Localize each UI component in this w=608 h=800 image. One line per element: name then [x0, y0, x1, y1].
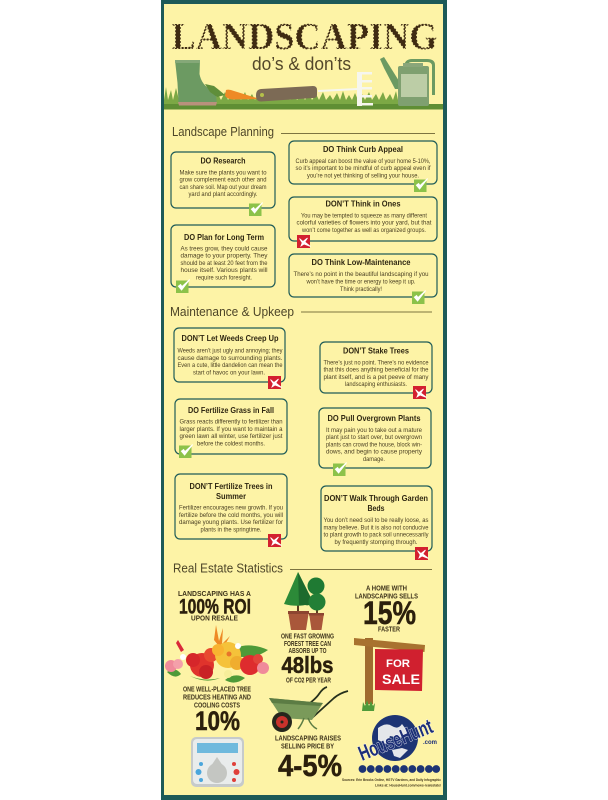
icon: for sale sign	[354, 638, 425, 711]
text block: Walk Through	[324, 517, 429, 546]
text block: Weeds	[178, 348, 283, 376]
sign text	[382, 658, 420, 687]
stat: 4-5%	[275, 734, 342, 783]
text block: Low-Maintenance	[294, 271, 429, 293]
panel: DON'T Think in Ones	[289, 197, 437, 248]
text block: Curb Appeal: you’re not yet thinking of selling your house.	[307, 172, 419, 180]
heading: Fertilize Trees	[190, 481, 272, 501]
text block: Walk Through: by frequently stomping through.	[334, 539, 418, 546]
panel: DO Fertilize Grass in Fall	[175, 399, 287, 458]
text block: Plan for Long Term: damage to your property. They	[180, 252, 268, 260]
stat: 100% ROI: LANDSCAPING HAS A	[178, 589, 251, 598]
text block: Plan for Long Term: house itself. Various plants will	[180, 267, 268, 274]
stat: 15%: A HOME WITH	[366, 584, 407, 592]
text block: Pull Overgrown Plants	[326, 427, 423, 463]
stat: 10%: 10%	[195, 706, 240, 736]
text block: Pull Overgrown Plants: plant just to start over, but overgrown	[326, 434, 422, 441]
text block: Weeds: cause damage to surrounding plants.	[178, 355, 283, 362]
title: LANDSCAPING	[172, 16, 438, 58]
text block: Think in Ones	[296, 212, 432, 234]
icon: hand rake	[256, 72, 373, 106]
icon: check	[179, 445, 193, 458]
text block: Low-Maintenance: There’s no point in the beautiful landscaping if you	[294, 271, 429, 278]
text block: Fertilize Grass: larger plants. If you want to maintain a	[180, 426, 283, 433]
subtitle: do’s & don’ts	[252, 54, 351, 74]
stat: 15%: LANDSCAPING SELLS	[355, 592, 418, 600]
page frame	[161, 0, 447, 800]
heading: Walk Through: DON’T Walk Through Garden	[324, 493, 428, 503]
icon: cross	[268, 376, 282, 389]
text block: Walk Through: to plant growth to pack soil unnecessarily	[324, 532, 429, 538]
text block: Stake Trees: landscaping enthusiasts.	[345, 381, 407, 388]
stat: 10%: COOLING COSTS	[194, 700, 240, 710]
text block: Low-Maintenance: won’t have the time or energy to keep it up.	[306, 278, 416, 286]
text block: Fertilize Trees: fertilize before the cold months, you will	[179, 512, 283, 519]
heading: Landscape Planning: Landscape Planning	[172, 124, 274, 139]
text block: Plan for Long Term	[180, 246, 268, 282]
stat: 48lbs: ONE FAST GROWING	[281, 632, 334, 640]
text block: Curb Appeal: Curb appeal can boost the value of your home 5-10%,	[296, 158, 431, 165]
text block: Weeds: Weeds aren’t just ugly and annoying; they	[178, 348, 283, 354]
text block: Weeds: start of havoc on your lawn.	[193, 370, 265, 376]
stat: 48lbs: FOREST TREE CAN	[284, 639, 331, 648]
text block: Fertilize Grass: Grass reacts differently to fertilizer than	[180, 418, 283, 426]
icon: cross	[268, 534, 282, 547]
icon: thermostat	[191, 737, 244, 787]
heading: Pull Overgrown Plants: DO Pull Overgrown Plants	[328, 413, 421, 423]
text block: DO Research: yard and plant accordingly.	[188, 191, 258, 198]
icon: check	[414, 179, 428, 192]
text block: Curb Appeal: so it’s important to be mindful of curb appeal even if	[296, 165, 431, 172]
text block: Fertilize Trees	[179, 504, 284, 534]
text block: Fertilize Trees: Fertilizer encourages new growth. If you	[179, 504, 283, 512]
grass band	[164, 87, 443, 110]
text block: Think in Ones: won’t come together as well as organized groups.	[301, 227, 426, 234]
heading: Fertilize Trees: DON’T Fertilize Trees in	[190, 481, 272, 491]
sources: Links at: HouseHunt.com/news-realestate/	[375, 784, 442, 788]
heading: Weeds: DON’T Let Weeds Creep Up	[182, 333, 278, 343]
text block: Stake Trees: There’s just no point. There’s no evidence	[324, 360, 429, 366]
text block: Pull Overgrown Plants: It may pain you to take out a mature	[326, 427, 422, 434]
text block: Low-Maintenance: Think practically!	[340, 286, 382, 293]
icon: cross	[415, 547, 428, 560]
heading: Real Estate Statistics: Real Estate Statistics	[173, 560, 283, 576]
icon: cross	[413, 386, 426, 399]
panel: DON'T Let Weeds Creep Up	[174, 328, 285, 389]
stat: 10%: REDUCES HEATING AND	[183, 692, 251, 702]
stat: 4-5%: SELLING PRICE BY	[281, 742, 334, 750]
text block: Pull Overgrown Plants: damage.	[363, 456, 385, 463]
panel: DON'T Stake Trees	[320, 342, 432, 399]
text block: Fertilize Trees: damage young plants. Use fertilizer for	[179, 519, 284, 526]
icon: check	[249, 203, 263, 216]
icon: rubber boot	[175, 60, 217, 106]
heading: Low-Maintenance: DO Think Low-Maintenance	[312, 257, 411, 267]
heading: Fertilize Grass: DO Fertilize Grass in Fall	[188, 405, 274, 415]
stat: 4-5%: 4-5%	[278, 748, 342, 783]
logo: HouseHunt	[355, 715, 437, 766]
text block: Plan for Long Term: As trees grow, they could cause	[180, 246, 268, 252]
icon: check	[333, 463, 347, 476]
icon: wheelbarrow	[269, 687, 348, 732]
social media icons	[359, 765, 440, 773]
text block: DO Research	[180, 170, 267, 198]
sign text: SALE	[382, 671, 420, 687]
icon: watering can	[380, 57, 435, 106]
text block: DO Research: can share soil. Map out your dream	[180, 184, 267, 191]
panel: DO Think Low-Maintenance	[289, 254, 437, 304]
panel: DO Think Curb Appeal	[289, 141, 437, 192]
stat: 100% ROI	[178, 589, 251, 622]
panel: DO Research	[171, 152, 275, 216]
text block: Weeds: Even a cute, little dandelion can mean the	[178, 362, 283, 369]
panel: DON'T Fertilize Trees in Summer	[175, 474, 287, 547]
header illustration	[164, 16, 443, 110]
text block: Pull Overgrown Plants: dows, and begin to cause property	[326, 448, 423, 456]
text block: Think in Ones: You may be tempted to squeeze as many different	[301, 212, 427, 220]
text block: DO Research: Make sure the plants you want to	[180, 170, 267, 176]
icon: tropical flowers	[165, 625, 269, 683]
text block: Plan for Long Term: should be at least 20 feet from the	[180, 260, 268, 267]
text block: DO Research: grow complement each other and	[180, 176, 267, 184]
stat: 15%	[355, 584, 418, 634]
stat: 100% ROI: UPON RESALE	[191, 614, 238, 622]
page background	[164, 4, 443, 795]
stat: 4-5%: LANDSCAPING RAISES	[275, 734, 341, 742]
icon: cross	[297, 235, 310, 248]
icon: potted topiary trees	[284, 572, 326, 630]
stat: 15%: FASTER	[378, 624, 400, 634]
icon: check	[412, 291, 426, 304]
stat: 48lbs: ABSORB UP TO	[288, 646, 327, 655]
panel: DO Pull Overgrown Plants	[319, 408, 431, 476]
text block: Think in Ones: colorful varieties of flowers into your yard, but that	[296, 220, 432, 226]
sources: Sources: Erin Brooks Online, HGTV Gardens, and Daily Infographic	[342, 778, 441, 782]
heading: Plan for Long Term: DO Plan for Long Term	[184, 232, 264, 242]
heading: Walk Through	[324, 493, 428, 513]
heading: DO Research: DO Research	[200, 156, 246, 166]
text block: Stake Trees: plant itself, and is a pet peeve of many	[324, 374, 429, 381]
panel: DO Plan for Long Term	[171, 225, 275, 293]
text block: Fertilize Grass: green lawn all winter, use fertilizer just	[180, 433, 283, 440]
text block: Stake Trees	[324, 360, 429, 388]
heading: Curb Appeal: DO Think Curb Appeal	[323, 144, 403, 154]
text block: Plan for Long Term: require such foresight.	[196, 274, 252, 282]
heading: Stake Trees: DON’T Stake Trees	[343, 346, 409, 356]
heading: Think in Ones: DON’T Think in Ones	[326, 198, 401, 208]
stat: 48lbs: OF CO2 PER YEAR	[286, 676, 331, 684]
logo: HouseHunt: .com	[423, 740, 437, 746]
icon: carrot	[205, 84, 260, 100]
icon: check	[176, 280, 190, 293]
text block: Curb Appeal	[296, 158, 431, 180]
stat: 48lbs: 48lbs	[282, 652, 334, 678]
text block: Pull Overgrown Plants: plants can crowd the house, block win-	[326, 442, 422, 448]
text block: Fertilize Grass: before the coldest months.	[197, 440, 265, 448]
stat: 48lbs	[281, 632, 334, 684]
text block: Walk Through: You don’t need soil to be really loose, as	[324, 517, 429, 524]
heading: Fertilize Trees: Summer	[216, 491, 247, 501]
heading: Walk Through: Beds	[368, 503, 385, 513]
text block: Stake Trees: that this does anything beneficial for the	[324, 366, 429, 374]
stat: 100% ROI: 100% ROI	[179, 596, 251, 618]
sign text: FOR	[386, 658, 410, 670]
text block: Walk Through: many believe. But it is also not conducive	[324, 524, 429, 532]
stat: 15%: 15%	[363, 595, 416, 631]
heading: Maintenance & Upkeep: Maintenance & Upkeep	[170, 304, 294, 319]
sources	[342, 778, 442, 788]
stat: 10%	[183, 684, 251, 736]
panel: DON'T Walk Through Garden Beds	[321, 486, 432, 560]
text block: Fertilize Grass	[180, 418, 283, 448]
text block: Fertilize Trees: plants in the springtime.	[200, 526, 262, 534]
stat: 10%: ONE WELL-PLACED TREE	[183, 684, 251, 694]
logo: HouseHunt: HouseHunt	[355, 715, 436, 766]
